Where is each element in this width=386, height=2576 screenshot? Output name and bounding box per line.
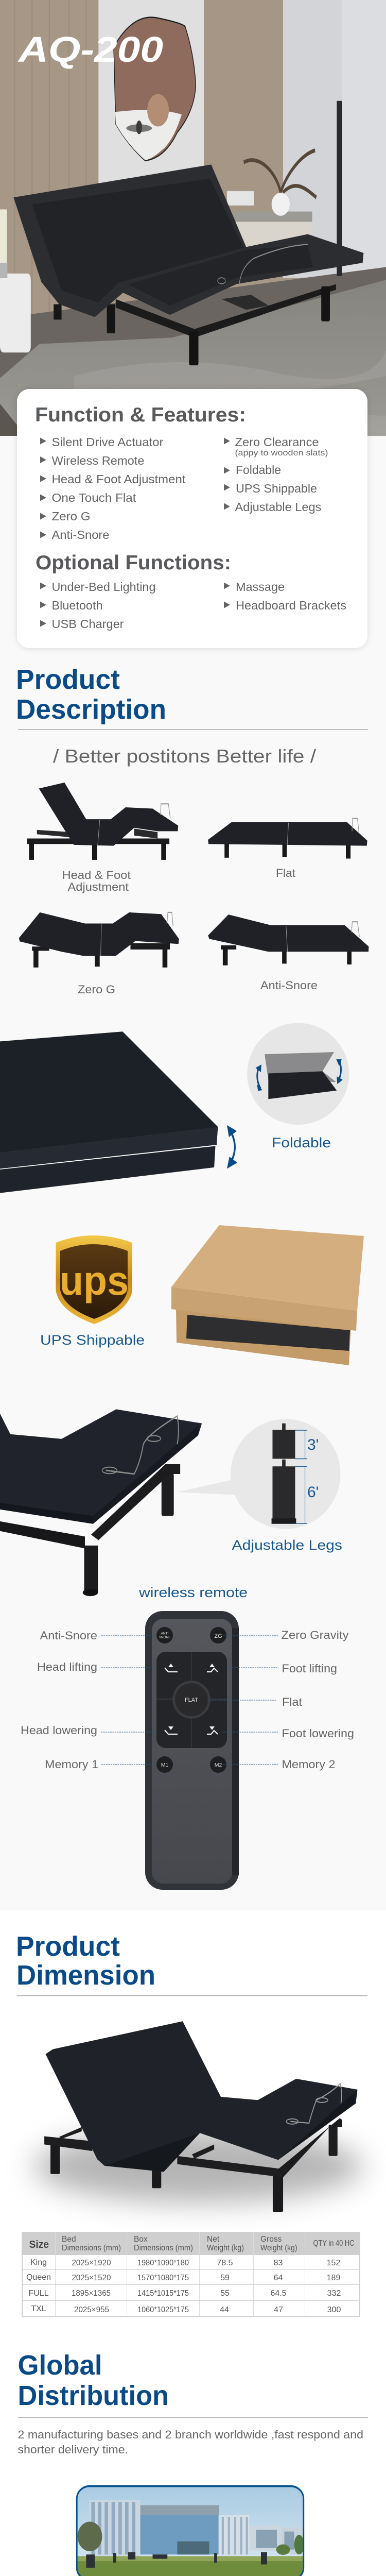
table header: Weight (kg): [207, 2244, 244, 2252]
table rows: 64.5: [270, 2289, 287, 2298]
feature list: Silent Drive Actuator: [51, 435, 164, 449]
button: zero gravity: [210, 1627, 226, 1643]
feature list: Foldable: [236, 463, 281, 477]
dimension labels: 3': [307, 1436, 319, 1453]
optional list: Under-Bed Lighting: [51, 580, 155, 594]
direction pad: [156, 1652, 227, 1748]
icon: foldable detail: [247, 1023, 349, 1125]
table rows: 1570*1080*175: [137, 2274, 189, 2282]
dimension labels: [307, 1436, 319, 1501]
section background: product description: [0, 436, 386, 1910]
table header: [29, 2235, 354, 2252]
table rows: 2025×1920: [72, 2259, 111, 2267]
table rows: 1060*1025*175: [137, 2306, 189, 2314]
label: zero g: Zero G: [78, 983, 115, 996]
table rows: 47: [274, 2306, 283, 2314]
remote labels right: [281, 1629, 354, 1771]
nightstand and vase: [234, 216, 312, 250]
remote labels right: Foot lifting: [282, 1662, 337, 1675]
remote labels right: Foot lowering: [282, 1727, 354, 1740]
folded bed close-up: [0, 1031, 237, 1193]
optional list: [51, 580, 346, 631]
label: adjustable legs: Adjustable Legs: [232, 1537, 342, 1553]
heading: product dimension: Dimension: [16, 1960, 155, 1991]
feature list: (appy to wooden slats): [235, 449, 328, 457]
remote control: [145, 1611, 239, 1890]
button: memory 1: M1: [161, 1762, 168, 1768]
mattress: [13, 164, 363, 317]
optional list: USB Charger: [51, 617, 124, 631]
label: flat: Flat: [276, 867, 295, 879]
dimension labels: 6': [307, 1484, 319, 1501]
bed position: flat: [208, 819, 367, 858]
feature list: One Touch Flat: [51, 491, 136, 504]
table header: Size: [29, 2239, 49, 2250]
table rows: 2025×1520: [72, 2274, 111, 2282]
heading: global distribution: Distribution: [17, 2380, 169, 2411]
table rows: 2025×955: [74, 2306, 109, 2314]
heading: optional functions: Optional Functions:: [36, 552, 231, 574]
label: head and foot adjustment: Head & Foot: [62, 869, 131, 882]
table rows: 1895×1365: [72, 2289, 111, 2298]
remote labels left: Head lifting: [37, 1660, 97, 1673]
remote labels right: Memory 2: [282, 1758, 336, 1771]
table rows: 332: [327, 2289, 341, 2298]
table header: Dimensions (mm): [62, 2244, 121, 2252]
table rows: 64: [274, 2274, 283, 2282]
body text: global distribution: [17, 2428, 363, 2456]
heading: global distribution: [17, 2350, 368, 2418]
tagline: / Better postitons Better life /: [53, 745, 316, 767]
heading: function and features: Function & Features:: [35, 404, 246, 426]
remote labels left: [21, 1629, 98, 1771]
label: ups shippable: UPS Shippable: [40, 1332, 145, 1348]
table header: Dimensions (mm): [134, 2244, 193, 2252]
button: anti snore: ANTI: [161, 1632, 169, 1635]
feature list: [51, 435, 328, 541]
table rows: 1980*1090*180: [137, 2259, 189, 2267]
body text: global distribution: 2 manufacturing bases and 2 branch worldwide ,fast respond and: [17, 2428, 363, 2441]
feature list: Anti-Snore: [51, 528, 109, 541]
bed illustration: [44, 2021, 357, 2212]
callout: adjustable legs: [177, 1419, 340, 1529]
remote labels right: Flat: [282, 1696, 302, 1708]
bed position: zero g: [19, 912, 179, 968]
direction pad: FLAT: [185, 1697, 198, 1703]
table rows: 300: [327, 2306, 341, 2314]
table rows: 189: [327, 2274, 340, 2282]
label: anti-snore: Anti-Snore: [260, 979, 318, 992]
dimension table: [22, 2232, 360, 2317]
label: head and foot adjustment: Adjustment: [68, 880, 129, 893]
button: memory 1: [156, 1756, 173, 1773]
label: head and foot adjustment: [62, 869, 131, 893]
table header: Bed: [62, 2235, 76, 2244]
wall art: [114, 18, 196, 161]
table rows: 1415*1015*175: [137, 2289, 189, 2298]
optional list: Headboard Brackets: [236, 599, 346, 612]
shipping carton: [171, 1225, 364, 1365]
table rows: 78.5: [217, 2259, 233, 2267]
button: memory 2: M2: [215, 1762, 222, 1768]
remote labels left: Head lowering: [21, 1724, 97, 1737]
heading: global distribution: Global: [17, 2350, 102, 2381]
feature list: Zero Clearance: [235, 435, 319, 449]
table rows: King: [30, 2258, 47, 2267]
button: anti snore: SNORE: [159, 1636, 171, 1639]
bed position: head and foot adjustment: [27, 783, 178, 860]
button: anti snore: [156, 1627, 173, 1643]
optional list: Massage: [236, 580, 285, 594]
feature list: Zero G: [51, 510, 91, 523]
table header: Net: [207, 2235, 220, 2244]
heading: product description: Product: [16, 664, 120, 695]
heading: product dimension: [16, 1931, 367, 1996]
table rows: 83: [274, 2259, 283, 2267]
callout: factory photo: [77, 2486, 304, 2576]
heading: product description: Description: [16, 694, 166, 725]
bed floor shadow: [33, 2130, 363, 2202]
bullet markers: [40, 438, 230, 626]
button: memory 2: [210, 1756, 226, 1773]
table header: QTY in 40 HC: [313, 2239, 354, 2248]
heading: wireless remote: wireless remote: [138, 1585, 248, 1600]
table rows: 152: [327, 2259, 340, 2267]
feature list: UPS Shippable: [236, 482, 317, 495]
remote labels left: Memory 1: [45, 1758, 98, 1771]
feature list: Head & Foot Adjustment: [51, 472, 186, 486]
table header: Box: [134, 2235, 148, 2244]
fold arrow: [229, 1128, 235, 1166]
logo: ups shield: [56, 1235, 132, 1324]
frame and legs: [116, 284, 336, 337]
remote labels right: Zero Gravity: [281, 1629, 349, 1641]
table header: Gross: [260, 2235, 282, 2244]
table header: Weight (kg): [260, 2244, 297, 2252]
feature list: Wireless Remote: [51, 454, 144, 467]
hero title: AQ-200: [17, 29, 163, 70]
heading: product dimension: Product: [16, 1931, 120, 1962]
hero photo: bed in bedroom: [0, 0, 386, 436]
optional list: Bluetooth: [51, 599, 103, 612]
feature list: Adjustable Legs: [235, 500, 321, 514]
label: foldable: Foldable: [272, 1135, 331, 1150]
button: zero gravity: ZG: [214, 1633, 222, 1639]
bed position: anti-snore: [208, 914, 369, 965]
table rows: [26, 2258, 341, 2314]
remote labels left: Anti-Snore: [40, 1629, 97, 1642]
heading: product description: [16, 664, 368, 730]
body text: global distribution: shorter delivery time.: [17, 2443, 128, 2456]
table rows: 44: [220, 2306, 229, 2314]
table rows: FULL: [28, 2289, 49, 2298]
remote leader lines: [101, 1635, 278, 1765]
logo: ups shield: ups: [60, 1258, 129, 1303]
table rows: 55: [220, 2289, 230, 2298]
table rows: Queen: [26, 2273, 51, 2282]
bed leg close-up: [0, 1409, 202, 1596]
panel: function and features card: [17, 389, 367, 649]
table rows: 59: [220, 2274, 230, 2282]
table rows: TXL: [31, 2304, 46, 2313]
